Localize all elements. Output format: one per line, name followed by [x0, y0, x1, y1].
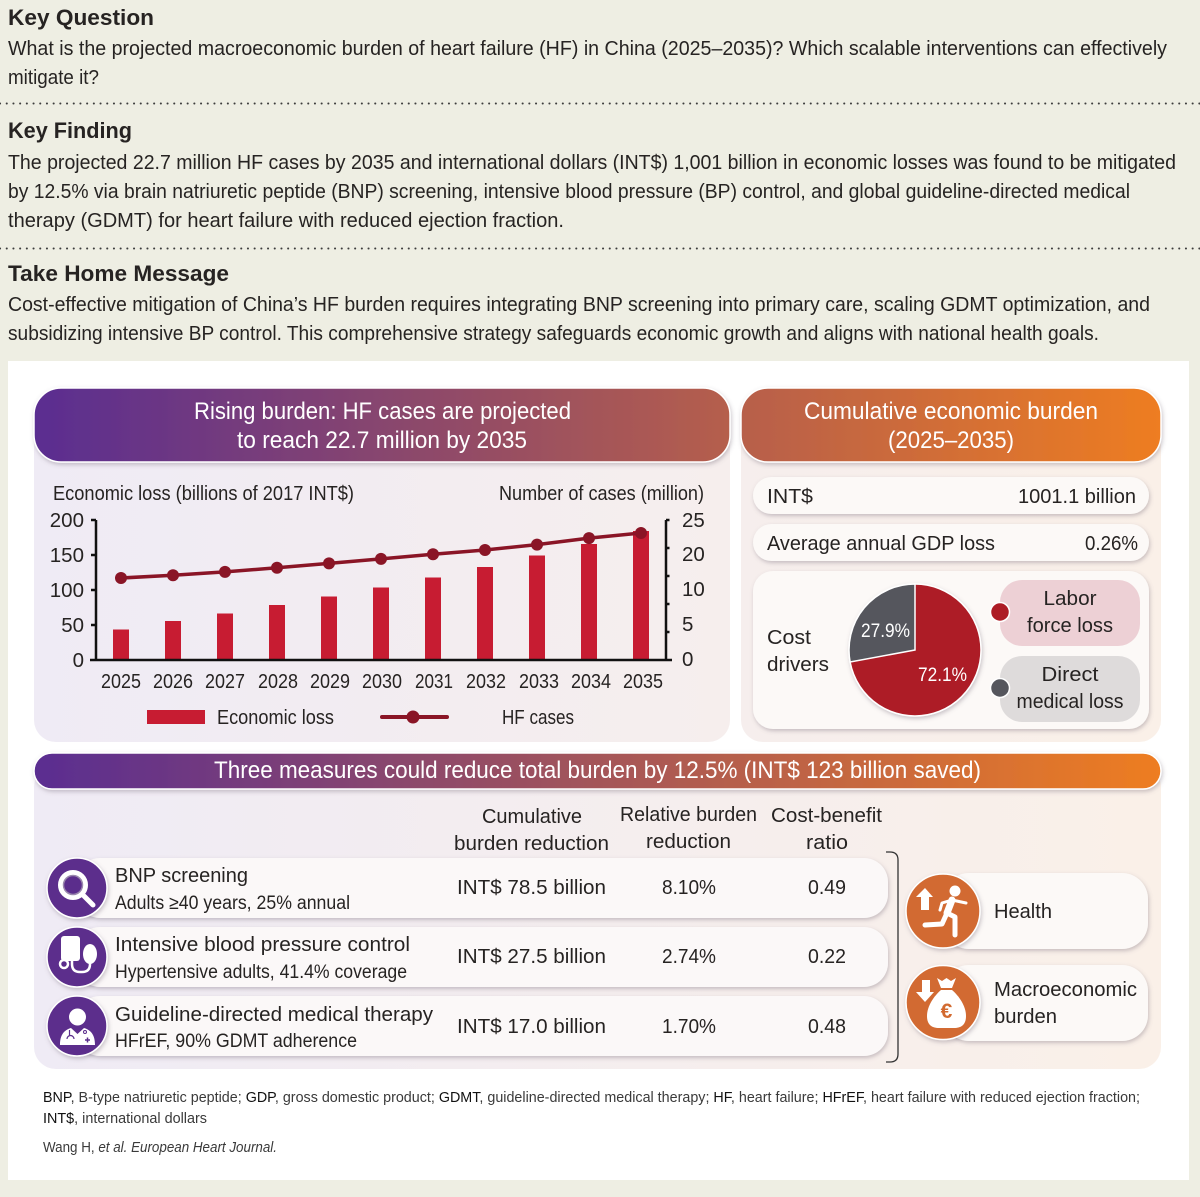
chart: economic loss and HF cases: 0 [73, 649, 84, 672]
bracket [886, 852, 898, 1062]
row: intensive blood pressure control: Hypertensive adults, 41.4% coverage [115, 962, 407, 983]
chart legend [147, 706, 574, 729]
heading: cumulative economic burden: (2025–2035) [888, 427, 1014, 454]
chart legend: HF cases [502, 706, 574, 729]
row: BNP screening [47, 858, 888, 918]
row: intensive blood pressure control: 0.22 [808, 945, 846, 968]
icon: blood pressure cuff [47, 927, 107, 987]
icon: doctor [47, 996, 107, 1056]
citation: Wang H, et al. European Heart Journal. [43, 1140, 277, 1156]
chart: economic loss and HF cases: 2035 [623, 670, 663, 693]
column headers: Cost-benefit [771, 804, 882, 827]
row: intensive blood pressure control [47, 927, 888, 987]
legend: labor force loss: Labor [1044, 587, 1097, 610]
icon: money bag with down arrow: € [941, 1000, 953, 1023]
card: cost drivers [753, 571, 1149, 729]
text block: take home message: Cost-effective mitigation of China’s HF burden requires integrating BNP screening into primary care, scaling GDMT optimization, and [8, 293, 1150, 316]
legend: labor force loss [990, 580, 1140, 646]
column headers: reduction [646, 830, 731, 853]
chart: economic loss and HF cases: 2033 [519, 670, 559, 693]
text block: key question: What is the projected macroeconomic burden of heart failure (HF) in China (2025–2035)? Which scalable interventions can effectively [8, 37, 1168, 60]
pie chart: cost drivers [849, 584, 981, 716]
heading: three measures [34, 753, 1161, 789]
heading: cumulative economic burden: Cumulative economic burden [804, 398, 1098, 425]
row: BNP screening: 0.49 [808, 876, 846, 899]
column headers: Relative burden [620, 803, 757, 826]
chart: economic loss and HF cases: 2025 [101, 670, 141, 693]
chart: economic loss and HF cases: 20 [682, 543, 705, 566]
footnote: abbreviations: BNP, B-type natriuretic peptide; GDP, gross domestic product; GDMT, guideline-directed medical therapy; HF, heart failure; HFrEF, heart failure with reduced ejection fraction; [43, 1090, 1140, 1106]
panel: cumulative economic burden [741, 388, 1161, 742]
text block: key finding: Key Finding [8, 118, 132, 143]
chart: economic loss and HF cases: Economic loss (billions of 2017 INT$) [53, 482, 354, 505]
row: GDP loss: Average annual GDP loss [767, 532, 995, 555]
legend: labor force loss: force loss [1027, 614, 1113, 637]
row: guideline-directed medical therapy: 1.70% [662, 1015, 716, 1038]
outcome: health [906, 873, 1148, 949]
row: total cost: 1001.1 billion [1018, 485, 1136, 508]
row: BNP screening: BNP screening [115, 864, 248, 887]
column headers: ratio [806, 831, 848, 854]
chart: economic loss and HF cases: Number of cases (million) [499, 482, 704, 505]
row: BNP screening: INT$ 78.5 billion [457, 876, 606, 899]
chart: economic loss and HF cases: 2030 [362, 670, 402, 693]
chart: economic loss and HF cases: 2028 [258, 670, 298, 693]
row: guideline-directed medical therapy: 0.48 [808, 1015, 846, 1038]
row: intensive blood pressure control: 2.74% [662, 945, 716, 968]
heading: rising burden: Rising burden: HF cases are projected [194, 398, 571, 425]
heading: rising burden: to reach 22.7 million by 2035 [237, 427, 527, 454]
chart: economic loss and HF cases: 2029 [310, 670, 350, 693]
text block: key finding: therapy (GDMT) for heart failure with reduced ejection fraction. [8, 209, 564, 232]
icon: money bag with down arrow [906, 966, 980, 1040]
text block: key question: Key Question [8, 5, 154, 30]
chart: economic loss and HF cases: 0 [682, 648, 693, 671]
footnote: abbreviations: INT$, international dollars [43, 1111, 207, 1127]
text block: take home message: Take Home Message [8, 261, 229, 286]
heading: rising burden [34, 388, 730, 462]
row: guideline-directed medical therapy [47, 996, 888, 1056]
chart: economic loss and HF cases: 2032 [466, 670, 506, 693]
card: cost drivers: drivers [767, 653, 829, 676]
row: GDP loss: 0.26% [1085, 532, 1138, 555]
row: intensive blood pressure control: Intensive blood pressure control [115, 933, 410, 956]
outcome: macroeconomic burden [906, 965, 1148, 1041]
chart: economic loss and HF cases [50, 482, 705, 693]
heading: cumulative economic burden [741, 388, 1161, 462]
outcome: macroeconomic burden: burden [994, 1005, 1057, 1028]
panel: rising burden [34, 388, 730, 742]
row: GDP loss [753, 524, 1149, 561]
pie chart: cost drivers: 27.9% [861, 621, 910, 642]
column headers: burden reduction [454, 832, 609, 855]
column headers [454, 803, 882, 855]
outcome: health: Health [994, 900, 1052, 923]
chart: economic loss and HF cases: 150 [50, 544, 84, 567]
icon: magnifying glass [47, 858, 107, 918]
white figure panel [8, 361, 1189, 1180]
column headers: Cumulative [482, 805, 582, 828]
text block: key question [8, 5, 1168, 89]
chart: economic loss and HF cases: 2034 [571, 670, 611, 693]
text block: take home message: subsidizing intensive BP control. This comprehensive strategy safeguards economic growth and aligns with national health goals. [8, 322, 1099, 345]
row: BNP screening: 8.10% [662, 876, 716, 899]
chart: economic loss and HF cases: 50 [61, 614, 84, 637]
chart: economic loss and HF cases: 25 [682, 509, 705, 532]
text block: key finding: The projected 22.7 million HF cases by 2035 and international dollars (INT$) 1,001 billion in economic losses was found to be mitigated [8, 151, 1176, 174]
icon: runner with up arrow [906, 874, 980, 948]
row: total cost: INT$ [767, 485, 814, 508]
text block: key question: mitigate it? [8, 66, 99, 89]
row: BNP screening: Adults ≥40 years, 25% annual [115, 893, 350, 914]
card: cost drivers: Cost [767, 626, 811, 649]
chart: economic loss and HF cases: 2031 [415, 670, 453, 693]
row: intensive blood pressure control: INT$ 27.5 billion [457, 945, 606, 968]
panel: three measures [34, 753, 1161, 1069]
legend: direct medical loss [990, 656, 1140, 722]
text block: take home message [8, 261, 1150, 345]
row: guideline-directed medical therapy: HFrEF, 90% GDMT adherence [115, 1031, 357, 1052]
chart: economic loss and HF cases: 5 [682, 613, 693, 636]
text block: key finding: by 12.5% via brain natriuretic peptide (BNP) screening, intensive blood pressure (BP) control, and global guideline-directed medical [8, 180, 1130, 203]
legend: direct medical loss: medical loss [1016, 690, 1124, 713]
chart: economic loss and HF cases: 200 [50, 509, 84, 532]
text block: key finding [8, 118, 1176, 232]
row: guideline-directed medical therapy: INT$ 17.0 billion [457, 1015, 606, 1038]
heading: three measures: Three measures could reduce total burden by 12.5% (INT$ 123 billion saved) [214, 757, 981, 784]
chart: economic loss and HF cases: 2026 [153, 670, 193, 693]
chart: economic loss and HF cases: 100 [50, 579, 84, 602]
chart: economic loss and HF cases: 10 [682, 578, 705, 601]
row: guideline-directed medical therapy: Guideline-directed medical therapy [115, 1003, 434, 1026]
chart legend: Economic loss [217, 706, 334, 729]
legend: direct medical loss: Direct [1042, 663, 1099, 686]
row: total cost [753, 477, 1149, 514]
chart: economic loss and HF cases: 2027 [205, 670, 245, 693]
pie chart: cost drivers: 72.1% [918, 665, 967, 686]
footnote: abbreviations [43, 1090, 1140, 1127]
outcome: macroeconomic burden: Macroeconomic [994, 978, 1137, 1001]
